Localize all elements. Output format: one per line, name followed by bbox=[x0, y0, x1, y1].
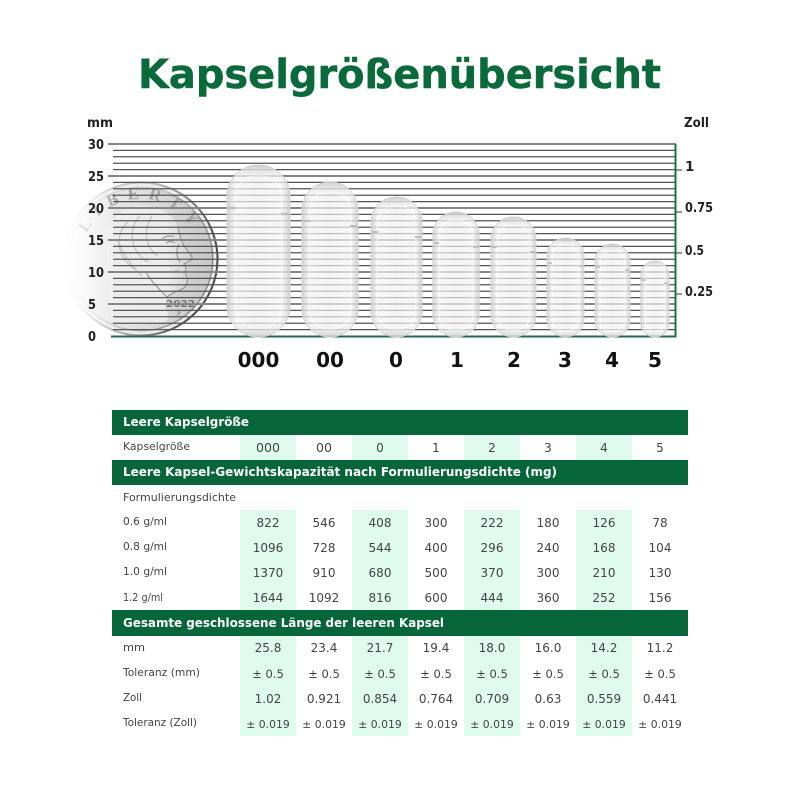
row: 1.0 g/ml: 370 bbox=[481, 566, 503, 580]
row: 1.2 g/ml: 252 bbox=[593, 591, 615, 605]
header: total closed length: Gesamte geschlossene Länge der leeren Kapsel bbox=[123, 615, 444, 630]
row: 0.8 g/ml bbox=[123, 540, 671, 555]
row: mm: 14.2 bbox=[591, 641, 617, 655]
row: tolerance inches: ± 0.019 bbox=[638, 718, 682, 731]
row: 0.8 g/ml: 0.8 g/ml bbox=[123, 540, 167, 553]
row: 0.8 g/ml: 104 bbox=[649, 541, 671, 555]
row: 1.0 g/ml: 500 bbox=[425, 566, 447, 580]
chart: capsule size comparison bbox=[77, 115, 713, 372]
axis: inches bbox=[676, 115, 713, 300]
axis: inches: 0.25 bbox=[685, 284, 713, 300]
header: total closed length bbox=[112, 610, 688, 636]
row: 1.0 g/ml: 210 bbox=[593, 566, 615, 580]
row: formulation density label: Formulierungsdichte bbox=[123, 491, 236, 504]
row: 0.6 g/ml: 222 bbox=[481, 516, 503, 530]
row: 1.0 g/ml: 1370 bbox=[253, 566, 283, 580]
row: mm: 11.2 bbox=[647, 641, 673, 655]
axis: millimetres: 10 bbox=[88, 265, 104, 281]
row: tolerance inches: Toleranz (Zoll) bbox=[122, 716, 197, 729]
axis: millimetres: 5 bbox=[88, 297, 96, 313]
row: tolerance inches: ± 0.019 bbox=[358, 718, 402, 731]
row: capsule size: 0 bbox=[376, 441, 384, 455]
row: 1.0 g/ml: 130 bbox=[649, 566, 671, 580]
row: 1.2 g/ml: 156 bbox=[649, 591, 671, 605]
row: 1.2 g/ml: 1.2 g/ml bbox=[123, 591, 163, 604]
title: Kapselgrößenübersicht bbox=[138, 52, 661, 98]
row: tolerance mm: ± 0.5 bbox=[588, 667, 620, 681]
capsule 00 bbox=[302, 182, 358, 337]
row: 0.8 g/ml: 296 bbox=[481, 541, 503, 555]
header: empty capsule size: Leere Kapselgröße bbox=[123, 414, 249, 429]
row: mm: 23.4 bbox=[311, 641, 337, 655]
row: 1.0 g/ml: 1.0 g/ml bbox=[123, 565, 167, 578]
row: capsule size: 00 bbox=[316, 441, 332, 455]
row: 0.8 g/ml: 240 bbox=[537, 541, 559, 555]
row: capsule size bbox=[123, 440, 664, 455]
icon: quarter coin: P bbox=[177, 311, 181, 318]
row: capsule size: 4 bbox=[600, 441, 608, 455]
row: tolerance inches: ± 0.019 bbox=[246, 718, 290, 731]
row: mm: mm bbox=[123, 641, 145, 654]
row: 1.2 g/ml: 444 bbox=[481, 591, 503, 605]
row: mm: 18.0 bbox=[479, 641, 505, 655]
capsule 5 bbox=[641, 261, 669, 337]
row: 0.8 g/ml: 168 bbox=[593, 541, 615, 555]
row: tolerance mm: Toleranz (mm) bbox=[122, 666, 200, 679]
icon: quarter coin: 2022 bbox=[166, 299, 195, 310]
row: tolerance inches: ± 0.019 bbox=[526, 718, 570, 731]
row: 0.6 g/ml: 0.6 g/ml bbox=[123, 515, 167, 528]
row: capsule size: Kapselgröße bbox=[123, 440, 190, 453]
row: 0.8 g/ml: 1096 bbox=[253, 541, 283, 555]
row: 1.2 g/ml: 816 bbox=[369, 591, 391, 605]
capsule size labels: 0 bbox=[389, 348, 403, 372]
row: 0.6 g/ml: 78 bbox=[652, 516, 668, 530]
row: inches: 0.764 bbox=[419, 692, 453, 706]
row: inches: 0.63 bbox=[535, 692, 561, 706]
chart frame bbox=[111, 144, 676, 336]
row: capsule size: 3 bbox=[544, 441, 552, 455]
row: 0.6 g/ml: 822 bbox=[257, 516, 279, 530]
row: tolerance mm: ± 0.5 bbox=[644, 667, 676, 681]
row: 1.0 g/ml: 300 bbox=[537, 566, 559, 580]
row: 0.6 g/ml bbox=[123, 515, 668, 530]
capsule size labels: 1 bbox=[450, 348, 464, 372]
capsule size labels: 3 bbox=[558, 348, 572, 372]
capsule 1 bbox=[433, 212, 479, 337]
row: tolerance inches: ± 0.019 bbox=[582, 718, 626, 731]
grid lines bbox=[108, 144, 676, 330]
axis: millimetres: 25 bbox=[88, 169, 104, 185]
row: 1.2 g/ml: 1644 bbox=[253, 591, 283, 605]
row: 0.8 g/ml: 728 bbox=[313, 541, 335, 555]
axis: millimetres: mm bbox=[87, 115, 113, 131]
row: 0.6 g/ml: 126 bbox=[593, 516, 615, 530]
axis: inches: 1 bbox=[685, 159, 694, 175]
capsule 4 bbox=[595, 244, 630, 337]
row: tolerance inches: ± 0.019 bbox=[414, 718, 458, 731]
row: tolerance inches bbox=[122, 716, 682, 731]
capsule size labels bbox=[238, 348, 662, 372]
header: empty capsule size bbox=[112, 410, 688, 435]
row: mm bbox=[123, 641, 673, 655]
row: 1.2 g/ml: 1092 bbox=[309, 591, 339, 605]
row: 0.6 g/ml: 546 bbox=[313, 516, 335, 530]
row: tolerance mm: ± 0.5 bbox=[476, 667, 508, 681]
capsule size labels: 2 bbox=[507, 348, 521, 372]
row: capsule size: 000 bbox=[256, 441, 280, 455]
capsule 0 bbox=[371, 197, 422, 337]
row: 1.0 g/ml: 910 bbox=[313, 566, 335, 580]
capsule size labels: 00 bbox=[316, 348, 344, 372]
table: capsule sizes and capacities bbox=[112, 410, 688, 736]
header: weight capacity bbox=[112, 460, 688, 485]
icon: quarter coin: LIBERTY bbox=[78, 188, 200, 232]
capsule 3 bbox=[547, 238, 584, 337]
header: weight capacity: Leere Kapsel-Gewichtskapazität nach Formulierungsdichte (mg) bbox=[123, 464, 557, 479]
axis: inches: Zoll bbox=[684, 115, 709, 131]
row: 0.8 g/ml: 400 bbox=[425, 541, 447, 555]
row: tolerance mm: ± 0.5 bbox=[420, 667, 452, 681]
capsule size labels: 5 bbox=[648, 348, 662, 372]
row: inches: 0.441 bbox=[643, 692, 677, 706]
icon: quarter coin bbox=[77, 182, 218, 336]
row: mm: 19.4 bbox=[423, 641, 449, 655]
row: 0.6 g/ml: 180 bbox=[537, 516, 559, 530]
row: inches: 0.559 bbox=[587, 692, 621, 706]
axis: millimetres: 15 bbox=[88, 233, 104, 249]
row: 1.2 g/ml: 600 bbox=[425, 591, 447, 605]
axis: millimetres: 30 bbox=[88, 137, 104, 153]
row: mm: 25.8 bbox=[255, 641, 281, 655]
row: inches: 0.854 bbox=[363, 692, 397, 706]
capsule 000 bbox=[227, 165, 290, 337]
row: mm: 16.0 bbox=[535, 641, 561, 655]
row: 1.2 g/ml: 360 bbox=[537, 591, 559, 605]
row: tolerance mm bbox=[122, 666, 676, 681]
highlighted table columns bbox=[240, 436, 632, 736]
row: capsule size: 5 bbox=[656, 441, 664, 455]
row: 1.0 g/ml: 680 bbox=[369, 566, 391, 580]
row: tolerance mm: ± 0.5 bbox=[532, 667, 564, 681]
row: 0.8 g/ml: 544 bbox=[369, 541, 391, 555]
axis: millimetres: 0 bbox=[88, 329, 96, 345]
axis: inches: 0.5 bbox=[685, 243, 704, 259]
row: inches bbox=[123, 691, 677, 706]
row: inches: 0.709 bbox=[475, 692, 509, 706]
row: 1.2 g/ml bbox=[123, 591, 671, 605]
row: tolerance mm: ± 0.5 bbox=[252, 667, 284, 681]
axis: millimetres: 20 bbox=[88, 201, 104, 217]
row: capsule size: 1 bbox=[432, 441, 440, 455]
row: inches: 0.921 bbox=[307, 692, 341, 706]
capsule size labels: 4 bbox=[605, 348, 619, 372]
row: tolerance mm: ± 0.5 bbox=[364, 667, 396, 681]
axis: millimetres bbox=[87, 115, 113, 345]
row: tolerance inches: ± 0.019 bbox=[470, 718, 514, 731]
capsule 2 bbox=[491, 217, 536, 337]
row: inches: Zoll bbox=[123, 691, 142, 704]
row: 1.0 g/ml bbox=[123, 565, 671, 580]
axis: inches: 0.75 bbox=[685, 200, 713, 216]
row: tolerance inches: ± 0.019 bbox=[302, 718, 346, 731]
row: tolerance mm: ± 0.5 bbox=[308, 667, 340, 681]
row: inches: 1.02 bbox=[255, 692, 281, 706]
row: mm: 21.7 bbox=[367, 641, 393, 655]
capsule size labels: 000 bbox=[238, 348, 279, 372]
row: 0.6 g/ml: 408 bbox=[369, 516, 391, 530]
row: capsule size: 2 bbox=[488, 441, 496, 455]
row: 0.6 g/ml: 300 bbox=[425, 516, 447, 530]
